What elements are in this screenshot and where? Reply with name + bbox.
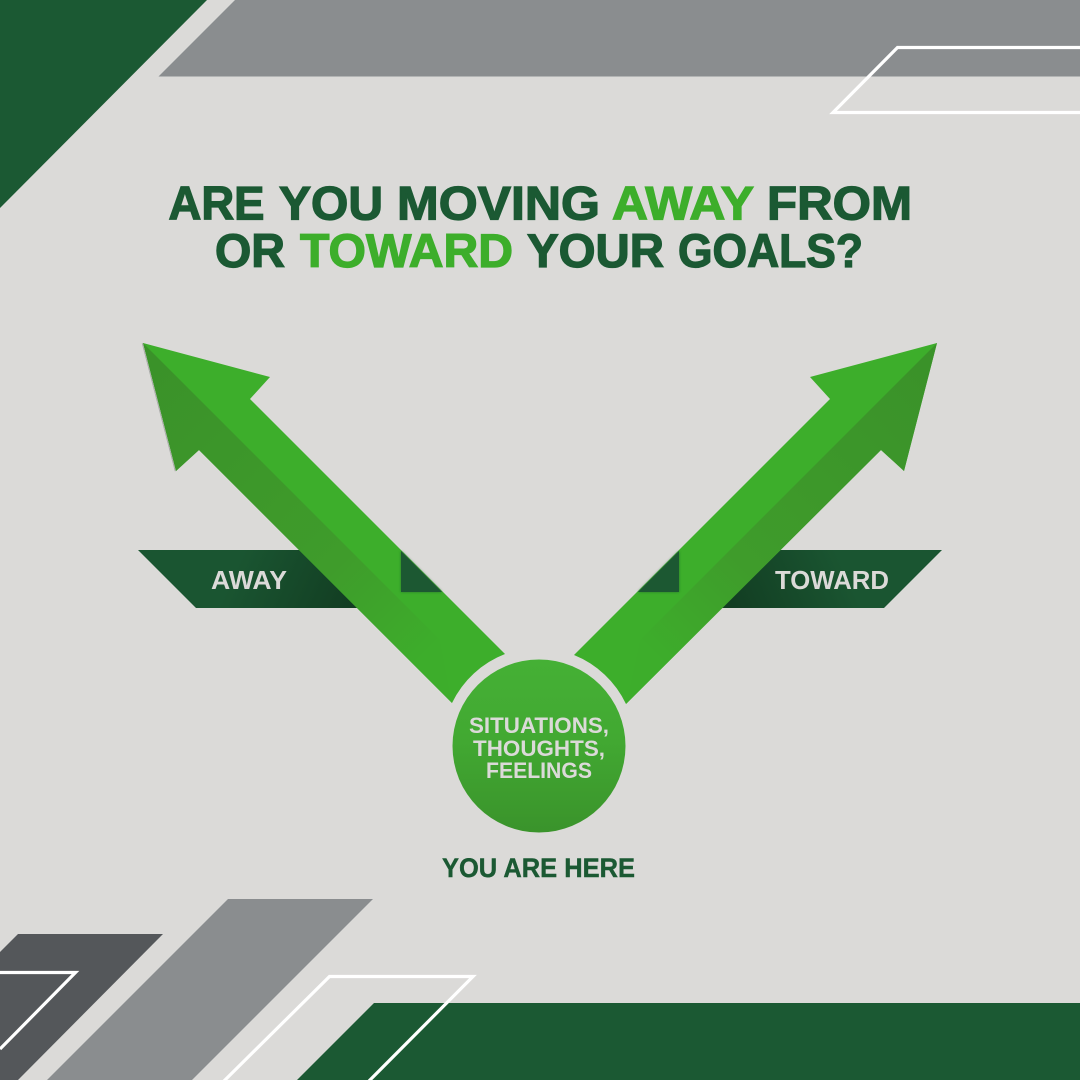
circle text: THOUGHTS, <box>473 736 605 761</box>
label: toward: TOWARD <box>775 567 889 595</box>
banner fold: left <box>401 551 442 592</box>
decoration: top left green triangle <box>0 0 207 208</box>
banner: toward <box>680 550 942 608</box>
title: GOALS? <box>678 225 863 278</box>
decoration: bottom grey parallelogram <box>47 899 373 1080</box>
decoration: top right white outline <box>833 48 1080 112</box>
title: TOWARD <box>300 225 513 278</box>
decoration: top grey band <box>158 0 1080 76</box>
title: ARE <box>168 178 264 230</box>
title: MOVING <box>397 178 600 230</box>
circle text <box>469 713 609 783</box>
decoration: bottom centre white outline <box>224 976 473 1080</box>
circle text: FEELINGS <box>486 758 592 783</box>
banner: away <box>138 550 400 608</box>
banner fold: right <box>638 551 679 592</box>
caption: you are here: YOU ARE HERE <box>442 853 635 883</box>
title: YOUR <box>527 225 664 278</box>
title: AWAY <box>612 178 754 230</box>
title: FROM <box>767 178 912 230</box>
arrow: left (away) <box>142 343 505 703</box>
decoration: bottom green band <box>297 1003 1080 1080</box>
label: away: AWAY <box>211 567 287 595</box>
decoration: bottom left dark grey shape <box>0 934 163 1080</box>
arrow: right (toward) <box>574 343 937 704</box>
title: OR <box>215 225 285 278</box>
decoration: bottom left white outline <box>0 972 76 1049</box>
title <box>168 178 912 278</box>
title: YOU <box>279 178 383 230</box>
circle text: SITUATIONS, <box>469 713 609 738</box>
centre circle: situations, thoughts, feelings <box>452 660 626 832</box>
